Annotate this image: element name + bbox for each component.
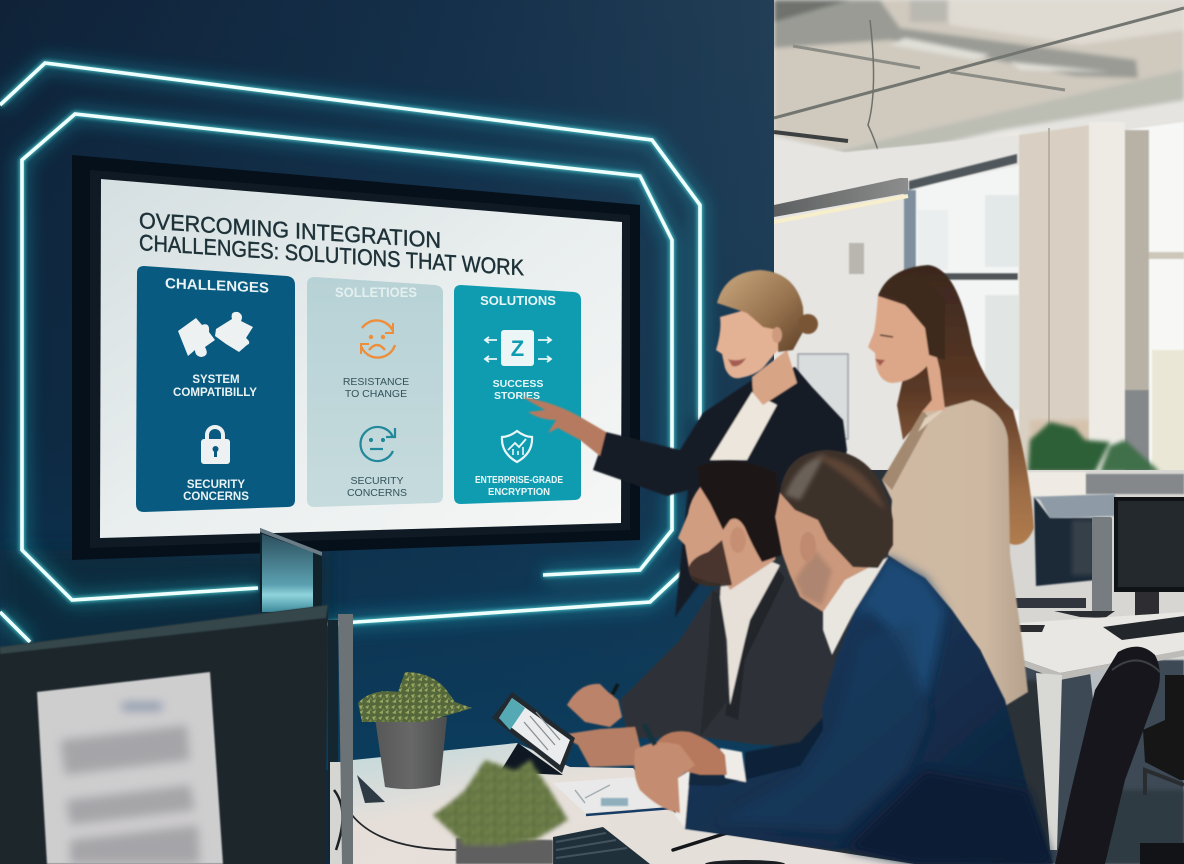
cuffs (675, 770, 690, 828)
navy feature wall (0, 0, 774, 770)
slide title: CHALLENGES: SOLUTIONS THAT WORK (139, 230, 524, 280)
face (716, 310, 782, 378)
panel: solleties: SOLLETIOES (335, 285, 417, 300)
window middle (904, 154, 1021, 450)
ear (730, 527, 746, 553)
panel: solleties (307, 277, 443, 507)
blazer (882, 400, 1028, 706)
monitor stand (328, 620, 338, 860)
icon: Z integration hub: Z (511, 336, 524, 361)
keyboard (553, 827, 650, 864)
ceiling pipes (774, 8, 1184, 118)
desk right (1018, 612, 1184, 673)
pen held (644, 724, 655, 745)
window right (1125, 122, 1184, 480)
large monitor (0, 605, 328, 864)
tablet (492, 692, 575, 773)
tablet stand (500, 743, 563, 775)
jacket (620, 566, 840, 745)
label: enterprise-grade encryption: ENCRYPTION (488, 486, 550, 498)
column (1019, 125, 1090, 470)
panel: challenges: CHALLENGES (165, 276, 269, 297)
label: resistance to change (343, 376, 409, 400)
monitor right (1114, 497, 1184, 592)
label: success stories: STORIES (494, 390, 540, 402)
panel: challenges (136, 266, 295, 512)
mouse (705, 860, 785, 864)
beard (688, 540, 732, 587)
label: success stories: SUCCESS (493, 378, 543, 390)
neck (752, 350, 797, 405)
screen surface (100, 179, 622, 538)
background plants (1028, 422, 1160, 472)
icon: Z integration hub (485, 330, 551, 366)
seated man in navy suit (634, 450, 1053, 864)
label: resistance to change: RESISTANCE (343, 376, 409, 388)
wall display with slide (72, 155, 640, 560)
paper on monitor (37, 672, 223, 864)
floor (774, 470, 1014, 864)
small monitor on wall side (260, 528, 322, 612)
shirt collar (823, 557, 888, 655)
white meeting desk (350, 692, 915, 864)
slide title: OVERCOMING INTEGRATION (139, 208, 441, 253)
hair (697, 461, 782, 562)
potted plant on desk (358, 672, 472, 789)
pen (673, 832, 730, 850)
screen bezel (72, 155, 640, 560)
label: security concerns (183, 479, 249, 503)
blouse (710, 392, 777, 460)
hands (655, 731, 727, 775)
label: resistance to change: TO CHANGE (345, 388, 407, 400)
label: success stories (493, 378, 543, 402)
monitor left (1034, 494, 1115, 518)
label: security concerns: CONCERNS (183, 491, 249, 503)
icon: padlock (201, 427, 230, 464)
woman with long hair in beige blazer (868, 265, 1034, 706)
icon: puzzle pieces (178, 312, 253, 357)
hand pointing (522, 397, 606, 456)
hand with pen (567, 684, 622, 727)
hair (780, 450, 893, 568)
icon: neutral face (361, 427, 395, 461)
label: system compatibility: COMPATIBILLY (173, 387, 257, 399)
label: security concerns: SECURITY (350, 475, 404, 487)
shirt (720, 562, 780, 705)
second chair (1143, 675, 1184, 780)
label: security concerns: CONCERNS (347, 487, 407, 499)
label: enterprise-grade encryption: ENTERPRISE-GRADE (475, 474, 563, 486)
ceiling lamp (774, 178, 908, 217)
panel: solutions: SOLUTIONS (480, 293, 556, 308)
hair (878, 265, 1034, 545)
hair (717, 270, 804, 352)
keyboard (1103, 616, 1184, 640)
jacket (682, 557, 1053, 864)
desk leg (1036, 673, 1062, 850)
cables (352, 815, 460, 850)
background desks and monitors (774, 470, 1184, 864)
blurred foreground plant (433, 760, 568, 864)
wall board (798, 354, 848, 439)
back sleeve (745, 715, 825, 785)
label: security concerns (347, 475, 407, 499)
label: system compatibility (173, 374, 257, 399)
ear (800, 532, 816, 562)
icon: sad face with arrows (361, 320, 395, 358)
side wall (774, 135, 1019, 480)
icon: shield (502, 431, 532, 462)
label: security concerns: SECURITY (187, 479, 245, 491)
foreground monitors (0, 528, 353, 864)
ceiling (774, 0, 1184, 178)
label: enterprise-grade encryption (475, 474, 563, 498)
seated man with beard (560, 461, 840, 767)
face and neck (775, 492, 880, 612)
white cabinet and partition (1026, 472, 1086, 496)
background office room (774, 0, 1184, 864)
woman pointing at screen (522, 270, 847, 617)
label: system compatibility: SYSTEM (192, 374, 240, 386)
cable tray lower (831, 70, 1184, 166)
slide title (139, 208, 524, 280)
neck and face (678, 487, 779, 590)
jacket and pointing arm (593, 367, 847, 617)
panel: solutions (454, 285, 581, 504)
office chair (1055, 647, 1160, 864)
cable tray upper (774, 0, 1138, 78)
neon outline frames (0, 63, 700, 642)
papers on desk (553, 777, 680, 813)
face (868, 296, 945, 412)
